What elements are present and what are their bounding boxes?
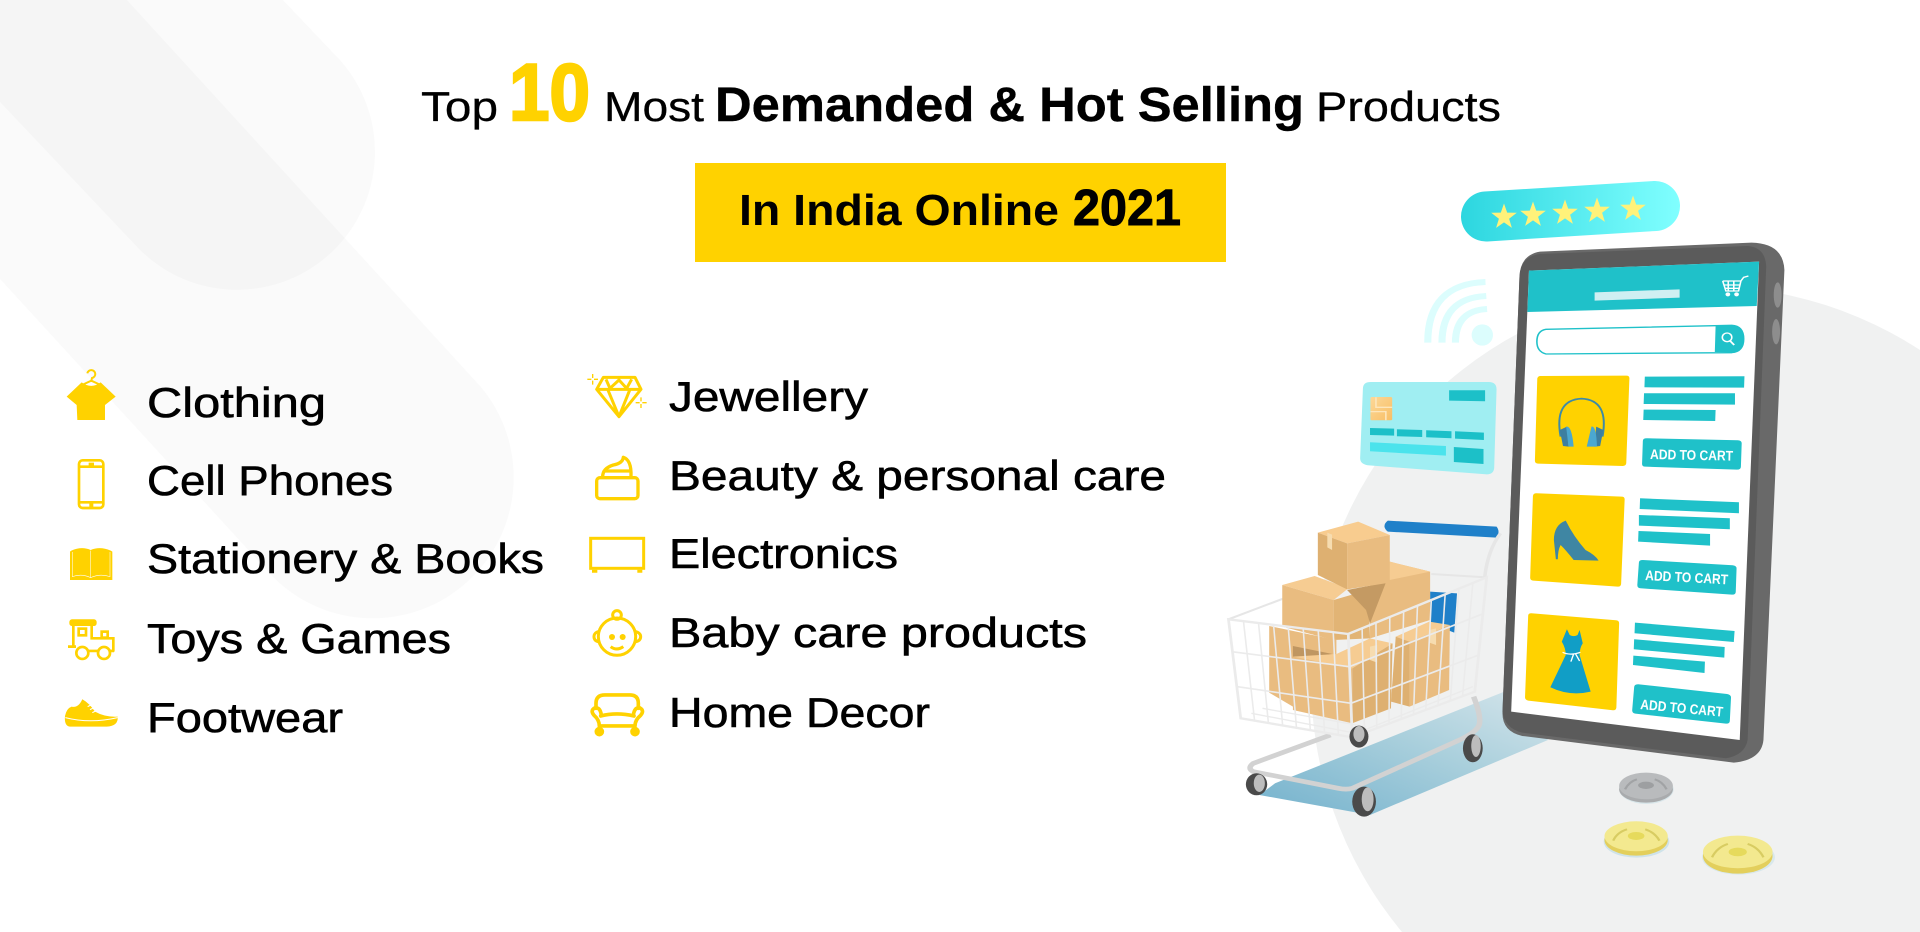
icon: sofa: [592, 695, 643, 735]
cart wheels: [1246, 726, 1483, 817]
credit card: [1360, 382, 1497, 474]
product card 1: [1535, 376, 1629, 466]
button label 3: ADD TO CART: [1640, 696, 1724, 720]
icon: cell phone: [79, 460, 103, 508]
icon: open book: [70, 548, 112, 580]
floor shadow: [1259, 690, 1548, 815]
item: Baby care products: Baby care products: [669, 609, 1087, 656]
wifi signal: [1428, 282, 1493, 346]
product card 2: [1530, 493, 1625, 587]
title: Top: [421, 83, 498, 130]
icon: sneaker: [65, 699, 118, 727]
list: right column: [669, 373, 1166, 736]
wire basket: [1228, 577, 1487, 737]
handle support: [1485, 533, 1501, 577]
item: Clothing: Clothing: [147, 379, 326, 426]
cart frame: [1250, 697, 1480, 789]
button label 2: ADD TO CART: [1645, 567, 1729, 587]
five stars: [1491, 196, 1646, 228]
icon: cream jar: [597, 457, 638, 499]
title: 10: [509, 48, 590, 138]
cart glyph: [1723, 276, 1748, 296]
subtitle banner: [695, 163, 1226, 262]
subtitle banner: 2021: [1073, 179, 1181, 236]
shopping cart with boxes: [1228, 521, 1501, 817]
rating pill: [1486, 196, 1655, 228]
cart handle: [1384, 521, 1499, 538]
title: [421, 48, 1501, 138]
product card 3: [1525, 613, 1619, 710]
icon: t-shirt on hanger: [67, 370, 116, 420]
silver coin: [1619, 773, 1674, 804]
item: Electronics: Electronics: [669, 530, 898, 577]
icon: toy train: [68, 621, 114, 659]
cardboard boxes: [1269, 522, 1450, 723]
app header: [1527, 262, 1759, 312]
icon: television: [591, 538, 644, 571]
button label 1: ADD TO CART: [1650, 446, 1734, 464]
item: Stationery & Books: Stationery & Books: [147, 535, 544, 582]
coins: [1604, 773, 1775, 875]
gold coin 1: [1604, 821, 1669, 858]
screen: [1511, 262, 1759, 740]
item: Cell Phones: Cell Phones: [147, 457, 393, 504]
item: Footwear: Footwear: [147, 694, 343, 741]
subtitle banner: In India Online: [739, 186, 1059, 235]
back wires: [1228, 574, 1487, 619]
icon: diamond: [587, 374, 647, 417]
title: Products: [1316, 83, 1501, 130]
item: Toys & Games: Toys & Games: [147, 615, 451, 662]
item: Beauty & personal care: Beauty & personal care: [669, 452, 1166, 499]
list: left column: [147, 379, 544, 741]
phone body: [1502, 243, 1784, 763]
title: Demanded & Hot Selling: [715, 79, 1304, 132]
background circle: [1311, 286, 1920, 932]
title: Most: [604, 83, 704, 130]
icon: baby face: [594, 611, 641, 655]
item: Home Decor: Home Decor: [669, 689, 930, 736]
gold coin 2: [1702, 836, 1775, 875]
item: Jewellery: Jewellery: [669, 373, 868, 420]
background diagonal bands: [0, 0, 514, 618]
smartphone: [1502, 243, 1784, 763]
search bar: [1537, 325, 1744, 354]
blue bag: [1430, 592, 1457, 633]
